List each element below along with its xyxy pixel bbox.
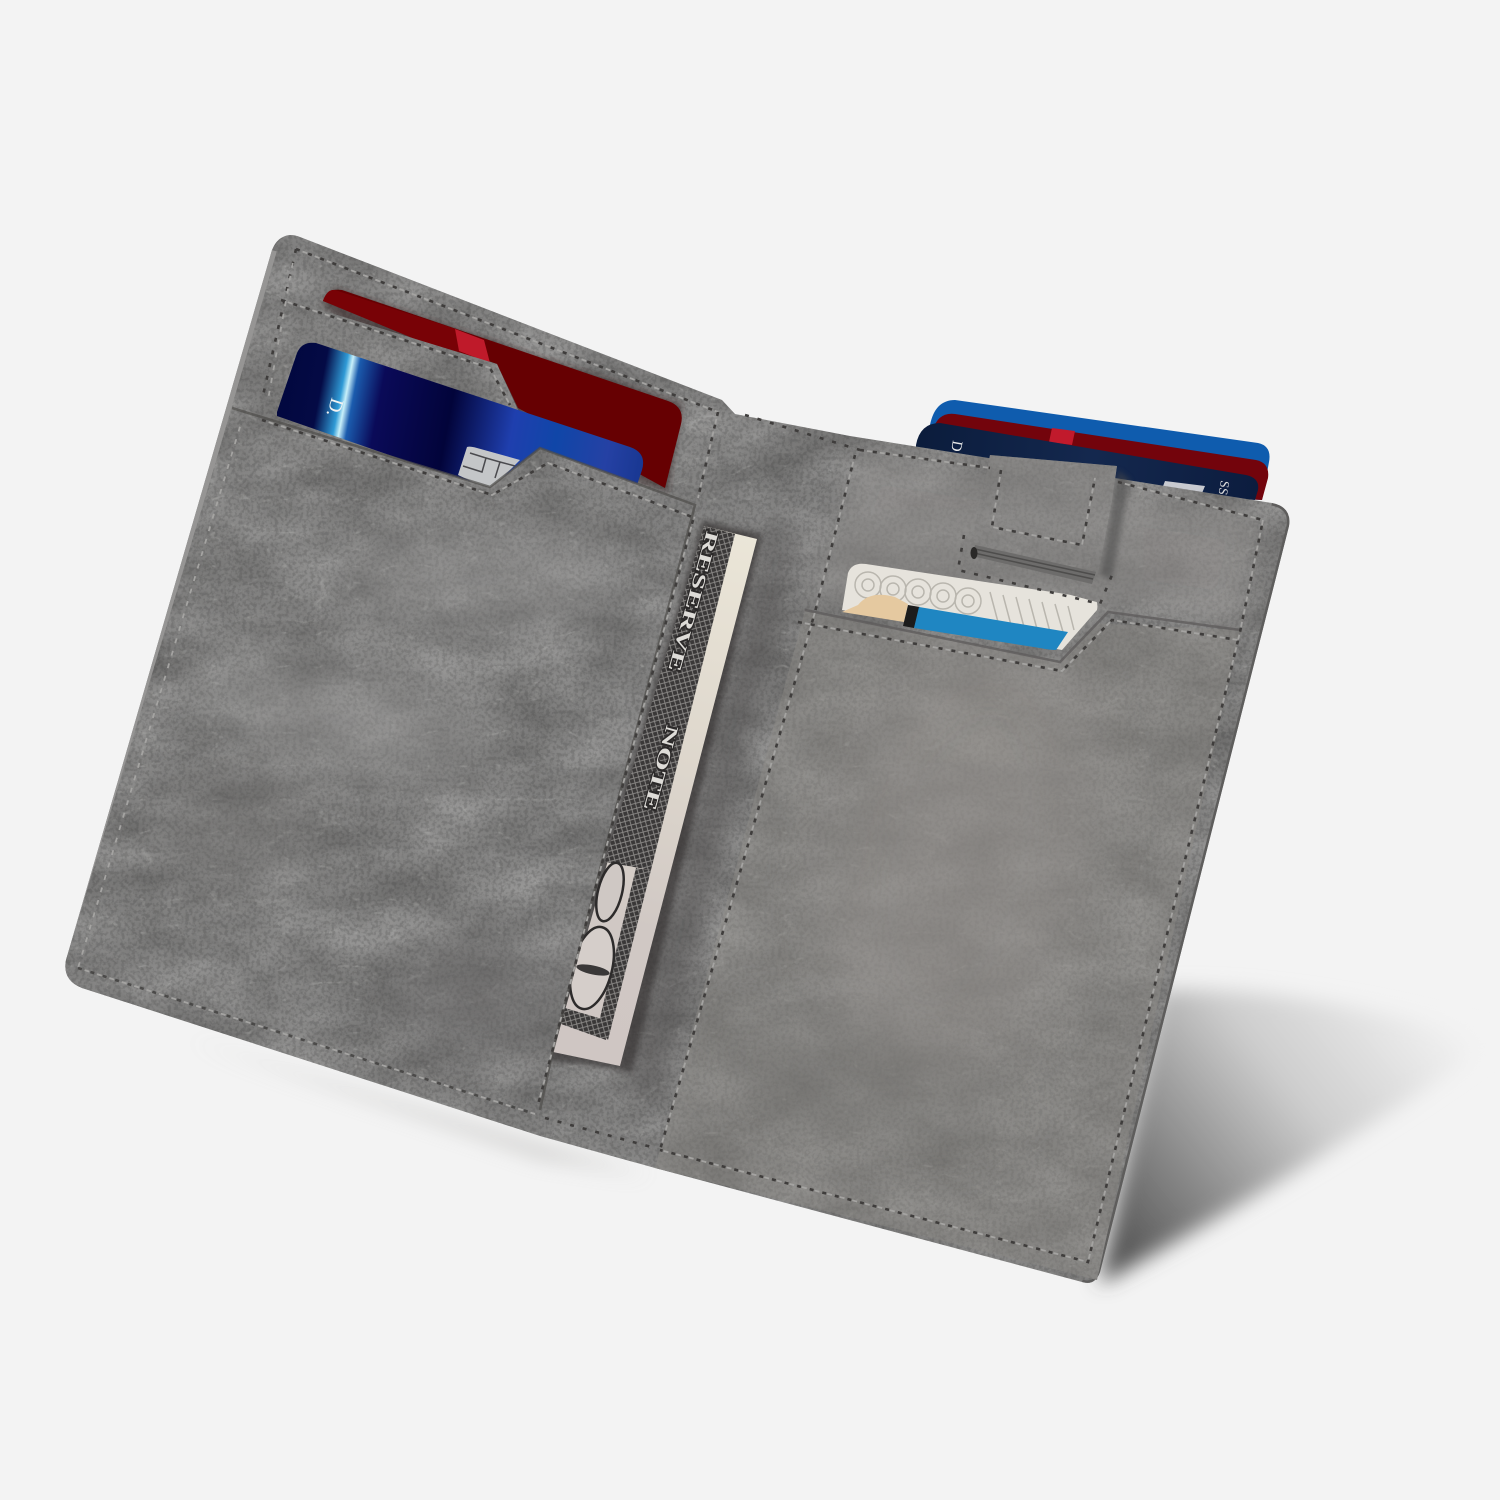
leather base	[40, 210, 1310, 1300]
blue card	[925, 400, 1270, 500]
bill text: reserve: RESERVE	[664, 529, 722, 674]
guilloche pattern	[855, 572, 1074, 632]
pull tab with elastic	[40, 210, 1310, 1300]
right front pocket	[655, 609, 1240, 1280]
bill in centre slot	[545, 520, 762, 1072]
slot shadow	[321, 288, 682, 492]
cast shadow	[190, 990, 1495, 1284]
black tab	[903, 605, 920, 628]
bill border ornament	[561, 1008, 612, 1040]
red card accent	[1049, 428, 1075, 445]
cards sticking out of right slot	[916, 400, 1270, 500]
navy card letter: D	[947, 439, 965, 453]
bill print lower rail	[598, 868, 651, 1040]
blue strip	[914, 607, 1068, 650]
tab stitching	[992, 470, 1095, 545]
red card	[323, 290, 682, 488]
bill text: note: NOTE	[640, 723, 682, 813]
spine shading	[620, 520, 800, 1100]
chip	[458, 447, 520, 490]
blue chip card	[277, 343, 643, 490]
pocket shadow edge	[232, 408, 695, 1110]
navy card corner letters: SS	[1216, 479, 1233, 496]
stitching	[78, 249, 1263, 1262]
pocket lower dark	[784, 1030, 954, 1124]
pocket light areas	[184, 645, 496, 795]
bill print band	[605, 526, 735, 870]
wallet illustration	[65, 235, 1438, 1292]
elastic hole	[970, 547, 978, 559]
wallet body	[40, 210, 1310, 1300]
card initial: D.	[322, 395, 347, 420]
tan patch	[842, 595, 908, 622]
red card upper tone	[323, 290, 480, 366]
upper left inner slot with red card	[321, 288, 682, 492]
tab cast shadow	[1100, 470, 1130, 580]
dark red card	[925, 414, 1268, 500]
right panel upper light	[822, 456, 1262, 618]
tab shape	[40, 210, 1310, 1300]
red card stripe	[455, 329, 490, 363]
navy card hologram	[1160, 481, 1205, 498]
slot shadow	[545, 520, 762, 1072]
pocket edge line	[805, 610, 1240, 662]
outer edge bands	[1082, 503, 1289, 1283]
pocket lighter centre	[842, 671, 1082, 1033]
pocket warm tone	[655, 610, 1240, 1280]
navy card	[916, 423, 1258, 500]
pocket dark area	[390, 940, 570, 1060]
middle pocket flap	[327, 312, 518, 410]
left front pocket	[65, 406, 696, 1110]
elastic	[972, 545, 1096, 584]
right inner card in pocket	[842, 564, 1097, 650]
bill paper	[553, 526, 757, 1066]
bill numeral 50	[562, 860, 629, 1014]
